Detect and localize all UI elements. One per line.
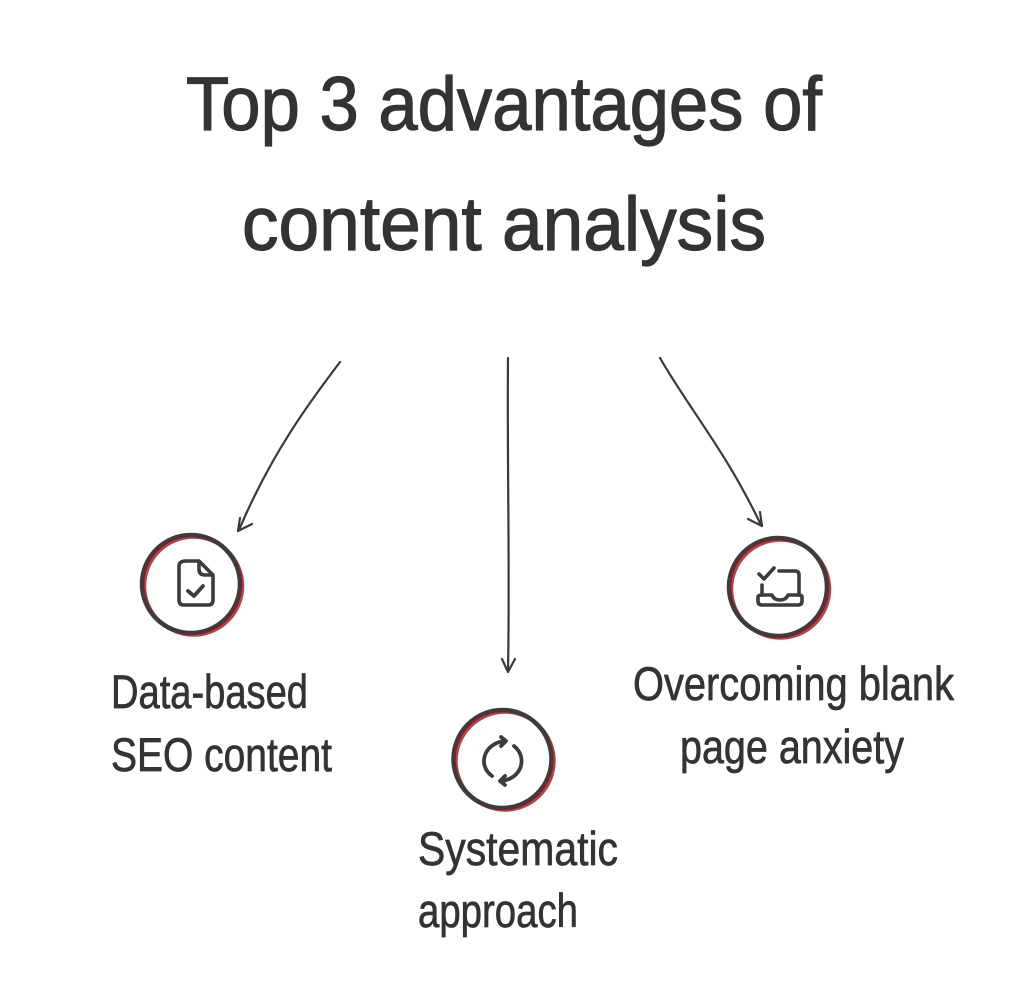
item: systematic approach [418,710,618,937]
title: Top 3 advantages of [186,62,823,147]
label: overcoming blank page anxiety [633,657,954,773]
arrow: to overcoming blank page anxiety [660,358,762,526]
arrow: to systematic approach [502,358,515,672]
icon: circular refresh arrows [454,710,554,810]
label: data-based SEO content: SEO content [111,728,332,781]
label: overcoming blank page anxiety: page anxiety [680,720,904,773]
title: content analysis [242,182,766,267]
label: systematic approach: approach [418,884,578,937]
item: data-based SEO content [111,535,332,781]
icon: document with check mark [142,535,242,635]
label: data-based SEO content [111,665,332,781]
arrow: to data-based SEO content [238,362,340,531]
label: overcoming blank page anxiety: Overcoming blank [633,657,954,710]
item: overcoming blank page anxiety [633,538,954,773]
label: systematic approach [418,822,618,937]
label: data-based SEO content: Data-based [111,665,308,718]
label: systematic approach: Systematic [418,822,618,875]
icon: laptop with check mark [729,538,830,638]
title [186,62,823,267]
